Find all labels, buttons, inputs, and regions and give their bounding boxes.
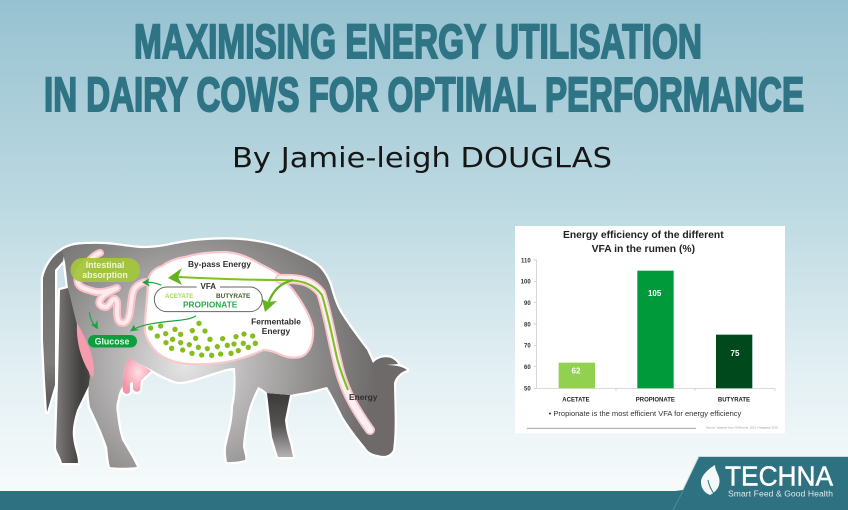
intestinal absorption pill: [70, 258, 140, 282]
esophagus tube: [280, 279, 370, 430]
cow tail: [43, 249, 65, 412]
VFA box: BUTYRATE: [216, 294, 250, 300]
bar: acetate 62: [559, 363, 595, 388]
intestine tube: [77, 253, 145, 323]
x axis: [537, 388, 775, 391]
bar: butyrate 75: 75: [731, 349, 740, 358]
VFA box: [154, 282, 262, 312]
cow front far leg: [267, 393, 293, 457]
bar: butyrate 75: [716, 335, 752, 388]
glucose pill: [88, 335, 137, 348]
VFA box: ACETATE: [165, 294, 193, 300]
chart panel: [515, 226, 785, 433]
footer bar: [0, 491, 848, 510]
rumen: [145, 252, 313, 364]
title: [44, 16, 804, 122]
y axis: 50: [524, 387, 531, 393]
y axis: 60: [524, 365, 531, 371]
intestinal absorption pill: absorption: [82, 270, 128, 280]
label: energy: Energy: [349, 392, 378, 402]
chart title: VFA in the rumen (%): [592, 244, 695, 255]
y axis: 90: [524, 301, 531, 307]
bar: propionate 105: [637, 271, 674, 388]
bar: acetate 62: 62: [572, 366, 581, 375]
y axis: 100: [521, 280, 531, 286]
byline: By Jamie-leigh DOUGLAS: [232, 141, 612, 174]
cow diagram: [43, 240, 407, 468]
category labels: [562, 398, 750, 404]
cow udder: [123, 358, 151, 394]
green metabolite arrows: [89, 278, 196, 331]
bar: propionate 105: 105: [648, 289, 662, 298]
VFA box: PROPIONATE: [183, 300, 238, 310]
label: by-pass energy: By-pass Energy: [188, 260, 251, 269]
category labels: PROPIONATE: [636, 398, 675, 404]
logo panel: [673, 456, 848, 510]
source line: Source: adapted from Chilibroste, 2012 | Nagaraja 2016: [706, 426, 778, 430]
category labels: ACETATE: [562, 398, 590, 404]
label: fermentable energy: Energy: [262, 326, 291, 336]
logo wordmark: TECHNA: [725, 460, 833, 492]
intestinal absorption pill: Intestinal: [86, 260, 124, 270]
y axis: 70: [524, 344, 531, 350]
fermentation dots: [148, 321, 258, 358]
y axis: 80: [524, 322, 531, 328]
energy arrows: [168, 268, 348, 390]
pink hind patch: [77, 323, 94, 378]
y axis: [521, 258, 537, 393]
cow rear far leg: [56, 288, 93, 463]
logo tagline: Smart Feed & Good Health: [728, 488, 833, 498]
y axis: 110: [521, 258, 531, 264]
chart title: Energy efficiency of the different: [563, 230, 724, 241]
cow body silhouette: [62, 240, 407, 468]
label: fermentable energy: Fermentable: [251, 316, 301, 326]
icon: leaf: [701, 465, 720, 495]
VFA box: VFA: [201, 282, 216, 291]
glucose pill: Glucose: [95, 336, 129, 346]
category labels: BUTYRATE: [718, 398, 750, 404]
chart note: • Propionate is the most efficient VFA for energy efficiency: [549, 411, 742, 418]
cow white outline: [43, 240, 407, 468]
